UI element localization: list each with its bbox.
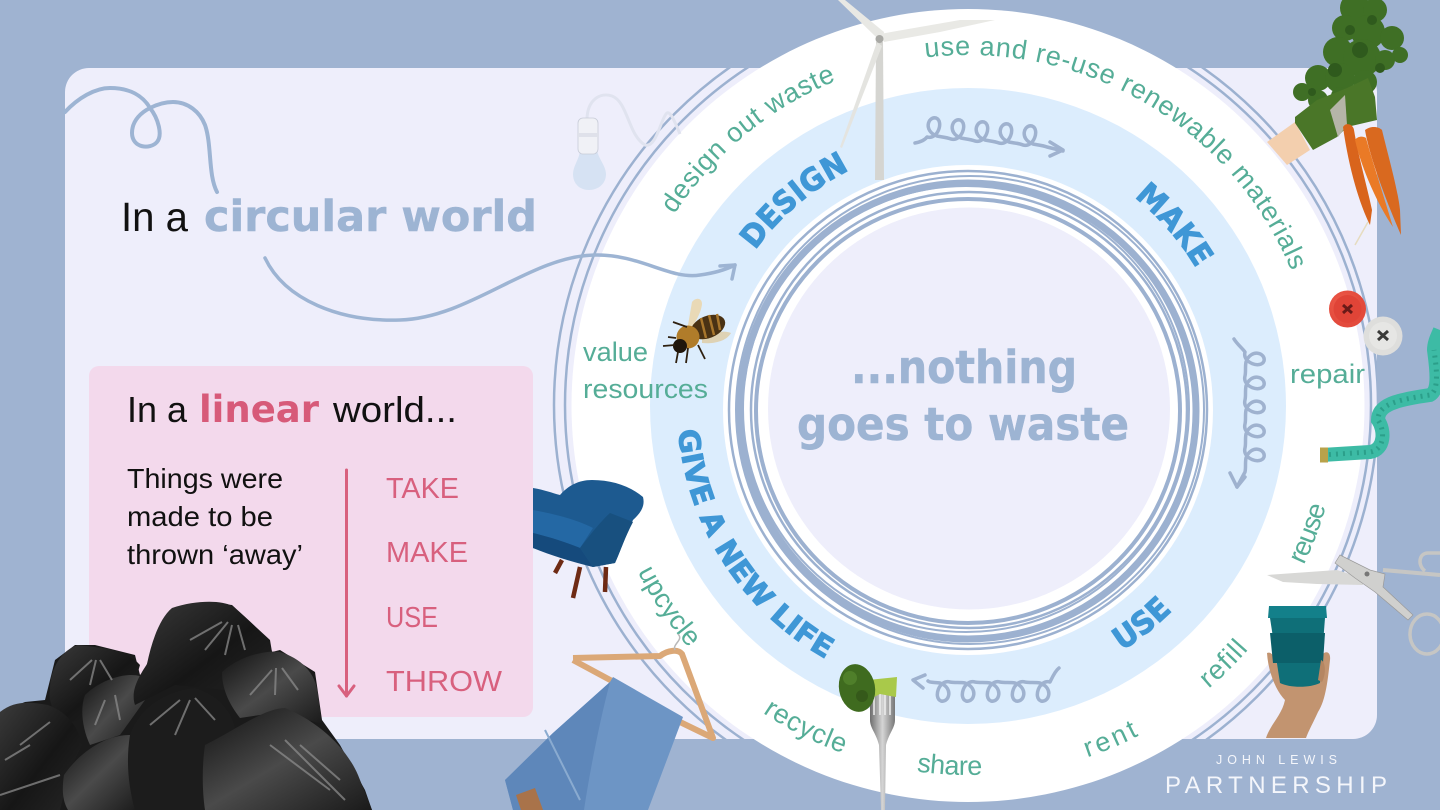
list: take make use throw: TAKE — [386, 473, 459, 505]
text: things were made to be thrown away — [127, 463, 303, 570]
heading: in a linear world — [127, 388, 457, 431]
spiral arrow: use to give a new life — [913, 668, 1059, 701]
text: things were made to be thrown away: thrown ‘away’ — [127, 539, 303, 570]
wavy line: top-left swirl — [65, 88, 217, 192]
panel: linear world — [89, 366, 533, 717]
icon: buttons — [1329, 290, 1402, 356]
icon: tape measure — [1320, 330, 1440, 455]
panel: main lavender card — [65, 68, 1377, 739]
spiral arrow: design to make — [915, 118, 1063, 156]
circular diagram rings — [572, 9, 1364, 802]
centre text: nothing goes to waste: goes to waste — [797, 398, 1129, 451]
label: value resources: value — [583, 337, 648, 367]
label: share: share — [918, 754, 982, 776]
label: recycle: recycle — [764, 702, 846, 752]
scribbled circle lines — [729, 171, 1207, 649]
centre text: nothing goes to waste: ...nothing — [851, 341, 1077, 394]
heading: in a circular world: circular world — [204, 192, 537, 242]
outer thin orbit lines — [552, 68, 1377, 739]
heading: in a linear world: world... — [332, 389, 457, 430]
stage label: make: MAKE — [1136, 181, 1214, 267]
label: design out waste: design out waste — [664, 70, 834, 212]
icon: scissors — [1267, 553, 1440, 654]
icon: carrots held in gloved hand — [1267, 0, 1408, 245]
icon: broccoli on fork — [835, 661, 897, 810]
arrow: linear downward — [339, 470, 354, 696]
heading: in a circular world: In a — [121, 194, 188, 240]
label: value resources — [583, 337, 708, 404]
list: take make use throw: THROW — [386, 666, 503, 698]
logo: john lewis partnership: PARTNERSHIP — [1165, 772, 1387, 799]
label: upcycle: upcycle — [640, 566, 697, 646]
icon: bee — [663, 299, 731, 363]
icon: wind turbine — [838, 0, 995, 180]
list: take make use throw — [386, 473, 503, 698]
heading: in a linear world: In a — [127, 389, 188, 430]
wavy arrow: circular world to design — [265, 255, 735, 320]
spiral arrow: make to use — [1230, 339, 1264, 487]
stage label: give a new life: GIVE A NEW LIFE — [678, 430, 836, 659]
logo: john lewis partnership — [1165, 753, 1387, 799]
list: take make use throw: MAKE — [386, 537, 468, 569]
label: reuse: reuse — [1292, 504, 1324, 564]
label: refill: refill — [1200, 638, 1248, 688]
stage label: use: USE — [1110, 595, 1172, 648]
label: use and re-use renewable materials: use and re-use renewable materials — [926, 40, 1303, 269]
text: things were made to be thrown away: Things were — [127, 463, 283, 494]
icon: armchair — [533, 480, 644, 598]
icon: light bulb — [573, 95, 680, 190]
list: take make use throw: USE — [386, 602, 438, 634]
stage label: design: DESIGN — [738, 150, 848, 249]
centre text: nothing goes to waste — [797, 341, 1129, 451]
icon: wooden hanger — [573, 634, 713, 738]
icon: folded jeans — [505, 677, 683, 810]
icon: reusable cup in hand — [1266, 606, 1330, 738]
text: things were made to be thrown away: made to be — [127, 501, 273, 532]
label: rent: rent — [1084, 721, 1138, 757]
logo: john lewis partnership: JOHN LEWIS — [1216, 753, 1337, 767]
label: value resources: resources — [583, 374, 708, 404]
heading: in a linear world: linear — [199, 388, 320, 431]
label: repair: repair — [1290, 359, 1365, 389]
icon: black bin bags — [0, 602, 372, 810]
